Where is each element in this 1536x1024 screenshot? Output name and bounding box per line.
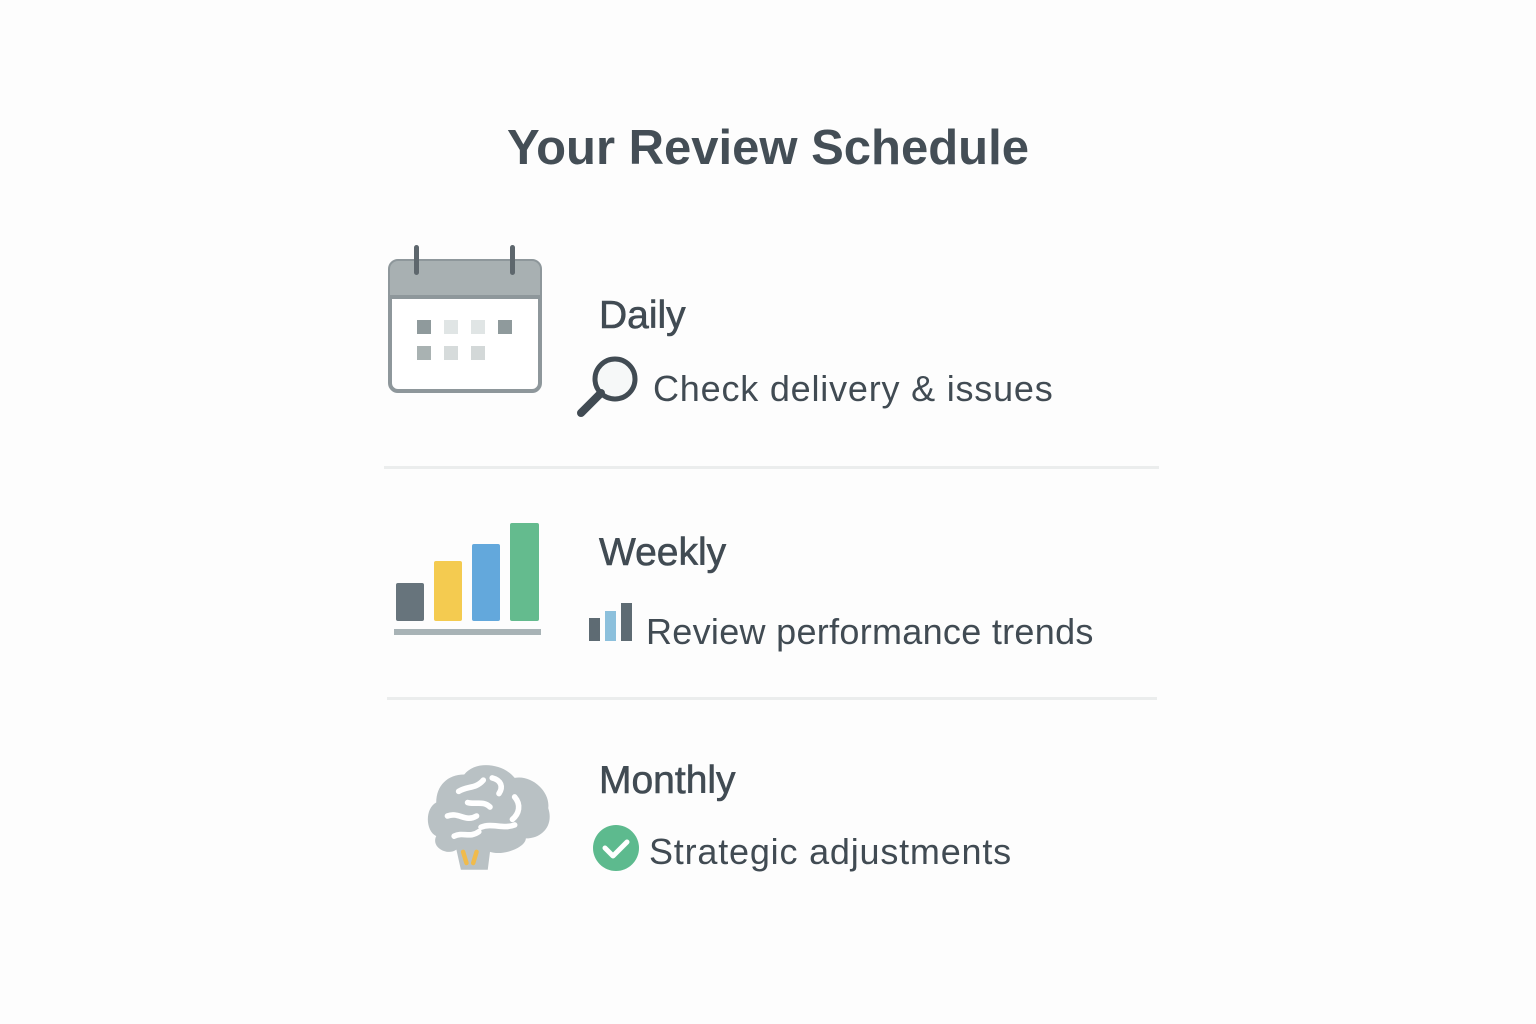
- icon: calendar: [388, 245, 542, 393]
- panel: monthly: [428, 759, 1012, 872]
- icon: magnifier: [577, 356, 638, 417]
- title: Your Review Schedule: [507, 121, 1029, 175]
- heading: Monthly: Monthly: [599, 759, 736, 802]
- panel: daily: [388, 245, 1054, 417]
- heading: Weekly: Weekly: [599, 531, 726, 574]
- text: monthly task: Strategic adjustments: [649, 831, 1012, 872]
- icon: bar chart: [394, 523, 541, 635]
- icon: small bars: [589, 603, 632, 641]
- heading: Daily: Daily: [599, 294, 686, 337]
- panel: weekly: [394, 523, 1094, 652]
- text: daily task: Check delivery & issues: [653, 368, 1054, 409]
- icon: brain: [428, 765, 550, 870]
- icon: check: [593, 825, 639, 871]
- text: weekly task: Review performance trends: [646, 611, 1094, 652]
